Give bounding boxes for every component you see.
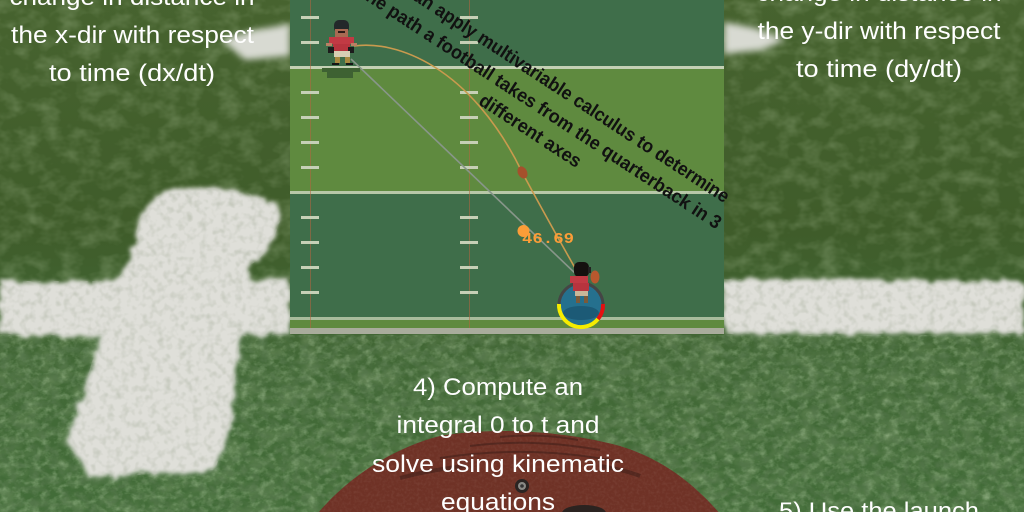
ball trajectory arc xyxy=(354,45,579,275)
text block: step 4 integral xyxy=(372,374,624,512)
text block: step 4 integral: solve using kinematic xyxy=(372,451,624,478)
text block: step 1 x-direction xyxy=(10,0,255,87)
panel: game field xyxy=(290,0,724,328)
icon: receiver player xyxy=(322,20,360,78)
text block: step 2 y-direction: to time (dy/dt) xyxy=(796,56,962,83)
caption: rotated overlay text: different axes xyxy=(475,90,585,172)
text block: step 4 integral: 4) Compute an xyxy=(413,374,583,401)
text block: step 2 y-direction xyxy=(756,0,1002,83)
text block: step 2 y-direction: the y-dir with respect xyxy=(758,18,1001,45)
text block: step 1 x-direction: the x-dir with respect xyxy=(11,22,254,49)
icon: football in flight xyxy=(515,165,530,180)
text block: step 1 x-direction: to time (dx/dt) xyxy=(49,60,215,87)
icon: quarterback with throw power ring xyxy=(559,262,603,327)
text block: step 4 integral: integral 0 to t and xyxy=(396,412,600,439)
distance readout: 46.69 xyxy=(522,231,574,248)
icon: target marker xyxy=(518,225,530,237)
line of sight from receiver to quarterback xyxy=(351,59,578,276)
background: football xyxy=(319,431,718,512)
